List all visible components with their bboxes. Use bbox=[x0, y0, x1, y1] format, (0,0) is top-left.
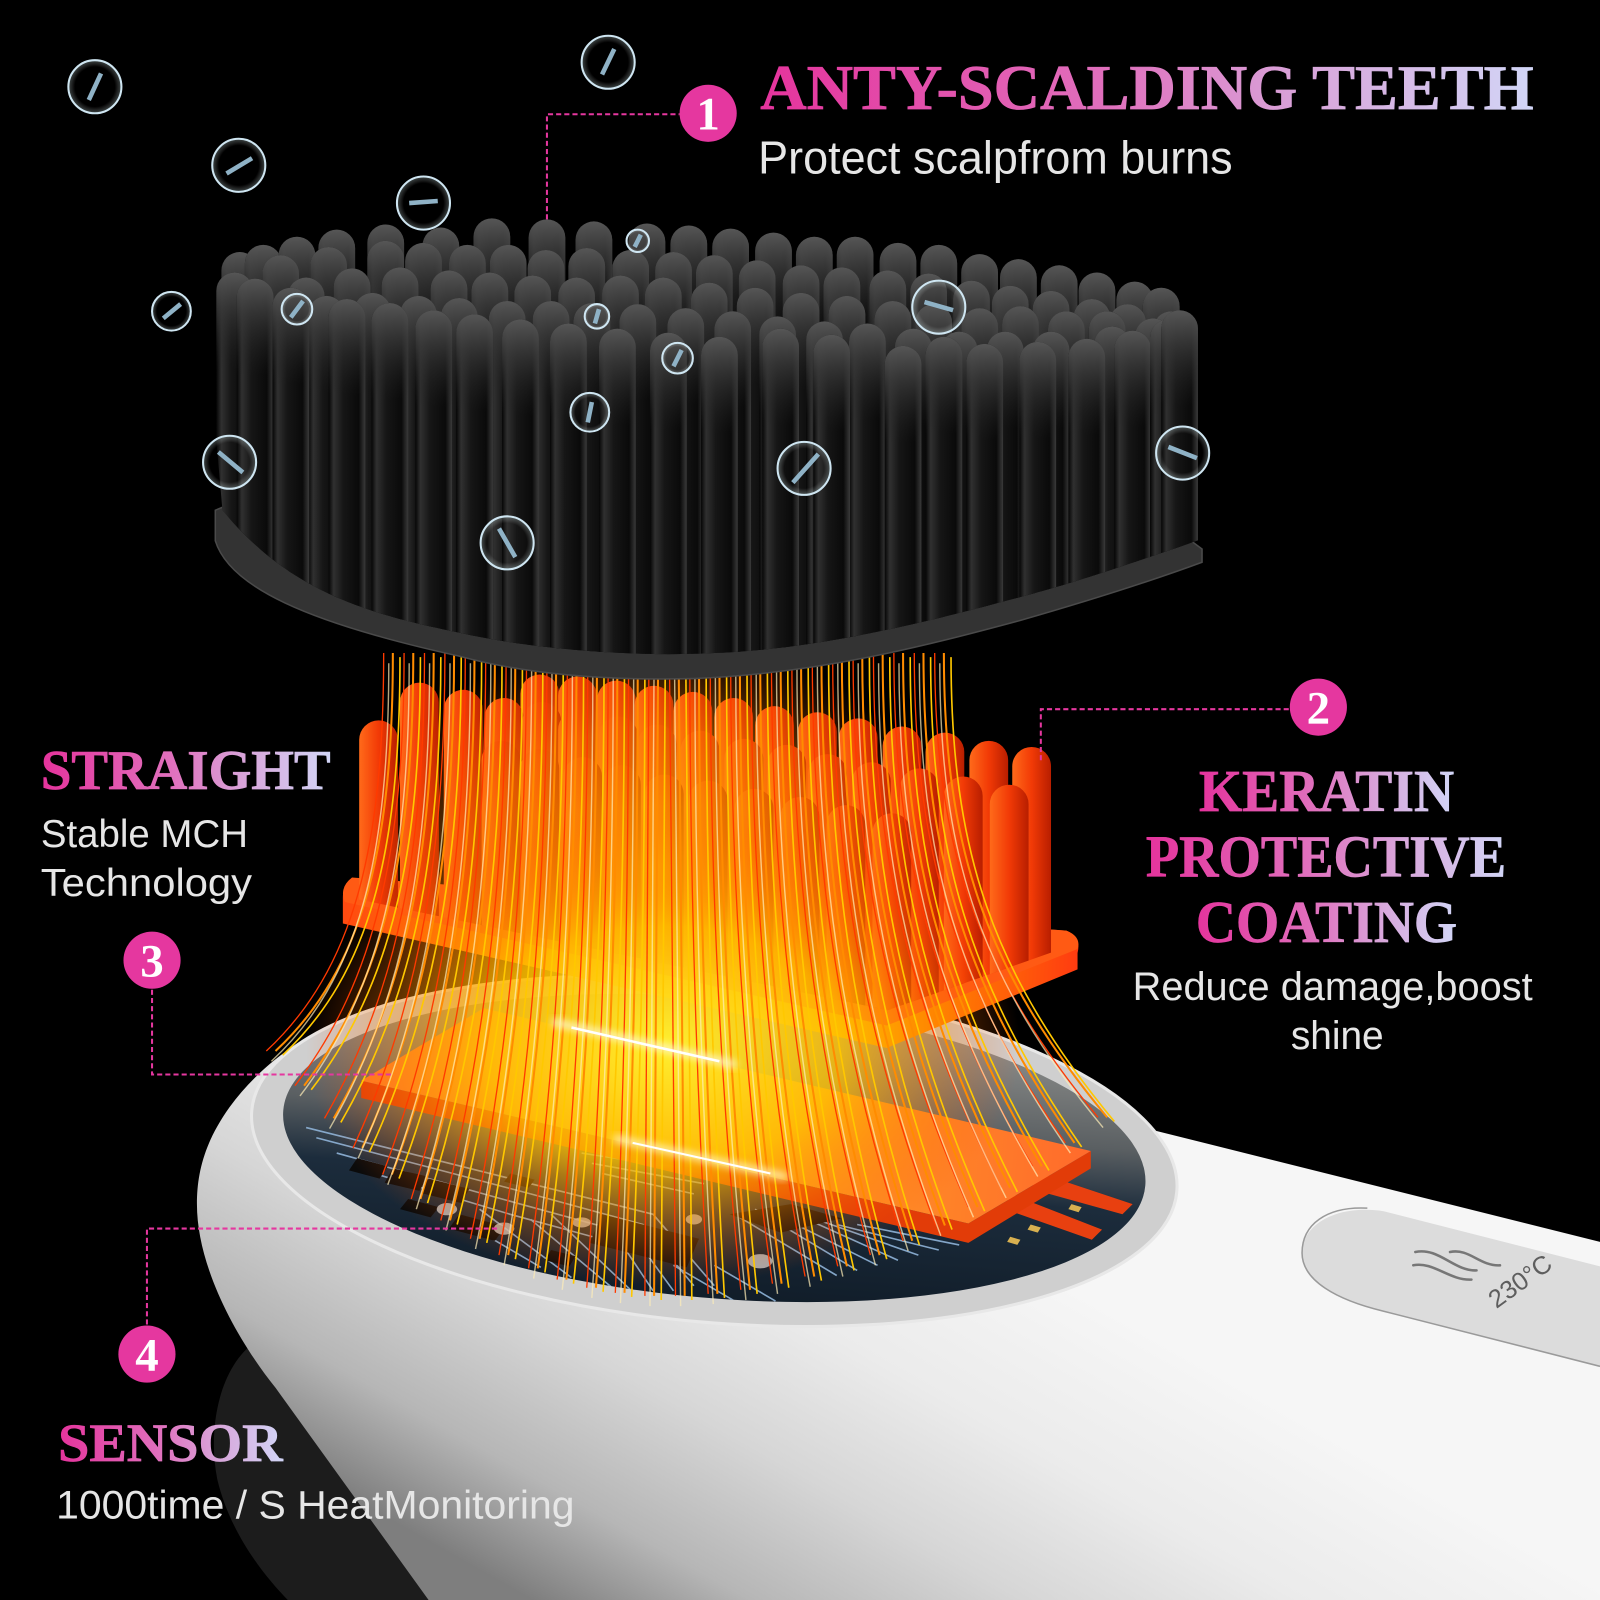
plate highlights bbox=[555, 1022, 734, 1064]
heading 1: ANTY-SCALDING TEETH bbox=[760, 53, 1534, 123]
heating plate bbox=[361, 1008, 1091, 1243]
number badge 2: 2 bbox=[1307, 682, 1330, 734]
heat glow bbox=[306, 806, 1020, 1286]
leader line 2 bbox=[1041, 709, 1290, 760]
number badge 1: 1 bbox=[696, 89, 720, 141]
description 1: Protect scalpfrom burns bbox=[758, 131, 1233, 183]
water bubbles bbox=[68, 36, 1209, 569]
device reflection bbox=[214, 1342, 439, 1600]
number badge 4 bbox=[118, 1326, 176, 1383]
heading 2: KERATIN bbox=[1199, 758, 1454, 824]
window bevel bbox=[237, 940, 1192, 1362]
heat flame streaks bbox=[266, 653, 1114, 1306]
heater connectors bbox=[1005, 1173, 1133, 1240]
description 4: 1000time / S HeatMonitoring bbox=[56, 1483, 574, 1527]
description 3 bbox=[41, 813, 253, 905]
callout 2: keratin coating bbox=[1041, 679, 1533, 1058]
description 2: Reduce damage,boost bbox=[1133, 965, 1533, 1009]
black anti-scalding comb bbox=[215, 218, 1202, 785]
teeth warm glow bbox=[357, 633, 949, 1102]
heading 2: COATING bbox=[1196, 889, 1457, 955]
number badge 3 bbox=[123, 932, 181, 989]
heading 3: STRAIGHT bbox=[41, 740, 331, 802]
number badge 1 bbox=[680, 85, 737, 142]
heading 4: SENSOR bbox=[58, 1413, 284, 1473]
description 3: Technology bbox=[41, 862, 253, 905]
circuit board window bbox=[283, 1000, 1146, 1302]
number badge 4: 4 bbox=[135, 1329, 159, 1381]
number badge 2 bbox=[1290, 679, 1347, 736]
comb teeth bbox=[216, 218, 1198, 654]
comb base plate bbox=[215, 490, 1202, 679]
callout 1: anti-scalding teeth bbox=[547, 53, 1534, 219]
callout 3: straight bbox=[41, 740, 393, 1074]
callout 4: sensor bbox=[56, 1229, 574, 1527]
description 3: Stable MCH bbox=[41, 813, 248, 856]
number badge 3: 3 bbox=[140, 936, 164, 988]
temperature label: 230°C bbox=[1483, 1250, 1558, 1314]
description 2 bbox=[1133, 965, 1533, 1058]
leader line 3 bbox=[152, 990, 393, 1074]
red ceramic teeth plate bbox=[343, 633, 1078, 1119]
red teeth bbox=[359, 674, 1051, 1010]
leader line 1 bbox=[547, 114, 680, 219]
heading 2: PROTECTIVE bbox=[1146, 824, 1506, 890]
leader line 4 bbox=[147, 1229, 500, 1324]
heading 2 bbox=[1146, 758, 1506, 955]
white device body bbox=[197, 940, 1600, 1600]
temperature pill bbox=[1302, 1208, 1600, 1366]
icon: heat waves bbox=[1413, 1251, 1500, 1280]
description 2: shine bbox=[1291, 1014, 1384, 1058]
